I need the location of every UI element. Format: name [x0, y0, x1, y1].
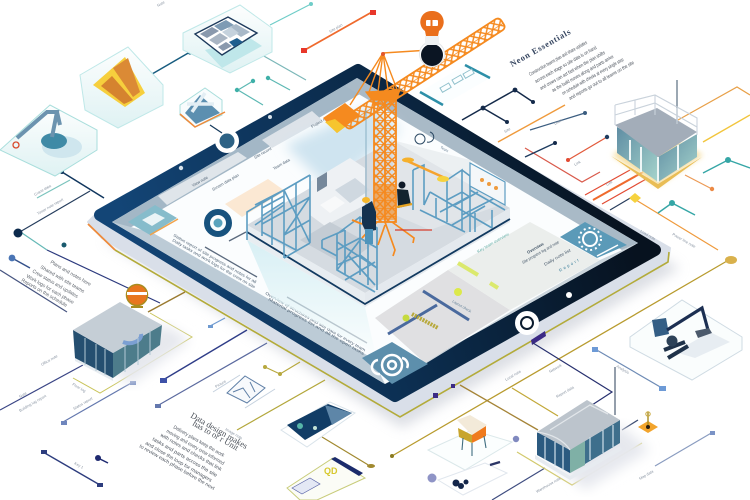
- article body: on schedule with checks at every single step: [561, 57, 625, 97]
- scaffold: right: [413, 165, 505, 232]
- text: gear panel caption: Key team overview: [476, 231, 511, 254]
- crane mast: [374, 97, 396, 222]
- article body: across each stage so site data is on hand: [534, 45, 598, 85]
- text: gear panel caption: [476, 231, 580, 273]
- article body: Construction teams plan and share updates: [528, 40, 589, 78]
- upper-left article: Crew status and updates: [31, 269, 79, 300]
- article body: and reports go out to all teams on the site: [568, 60, 636, 102]
- small captions: Crane data: [34, 184, 53, 197]
- small captions: Data: [554, 118, 563, 126]
- panel: teal at-sign card: [362, 342, 428, 384]
- sign board: [470, 163, 505, 205]
- upper-left article: Reports on the schedule: [20, 278, 68, 309]
- text: screen captions: Team data: [272, 157, 291, 171]
- article body: as the build moves along and parts arrive: [551, 54, 615, 94]
- icon: gear: [579, 228, 618, 256]
- haze under platform: [247, 240, 375, 352]
- lower article: [138, 410, 250, 492]
- worker one: [352, 197, 376, 244]
- platform slab: [247, 140, 510, 307]
- crane apex and cables: [350, 50, 430, 105]
- small captions: Report data: [556, 385, 575, 399]
- building: lower left office: [73, 302, 190, 385]
- article heading: Data design makes: [189, 410, 250, 451]
- small captions: Floor log: [72, 382, 86, 393]
- upper-left article: [20, 260, 92, 309]
- upper-left article: Work logs for each phase: [25, 274, 75, 306]
- text: screen captions: Site record: [253, 146, 272, 160]
- small captions: Office note: [40, 354, 58, 367]
- panel: teal gear card: [560, 222, 627, 258]
- panel: teal image card: [128, 205, 178, 235]
- chart: site pipes on screen: Layout check: [452, 299, 472, 314]
- small captions: Note: [156, 0, 165, 8]
- tablet bezel knob, top left: [215, 129, 239, 153]
- article body: [138, 425, 226, 492]
- tablet bezel knob, bottom: [515, 311, 539, 335]
- article body: tasks and parts across the site: [151, 437, 218, 479]
- article heading: Neon Essentials: [508, 26, 573, 69]
- small captions: Picture: [214, 379, 227, 389]
- icon: picture outline: [213, 375, 275, 408]
- small captions: Status report: [72, 396, 94, 411]
- crane apex pin: [381, 52, 385, 56]
- icon: orange helmet badge: [126, 284, 148, 308]
- small captions: Tower note report: [36, 197, 65, 216]
- tablet screen: [112, 78, 638, 384]
- building: rooftop glass pavilion: [611, 95, 703, 189]
- panel: upper grey band: [262, 111, 322, 148]
- small captions: Analysis: [616, 364, 630, 375]
- hex panel: excavator: [630, 300, 742, 380]
- article body: [528, 40, 636, 102]
- phone: [281, 402, 355, 447]
- text: gear panel caption: Overview: [526, 241, 545, 255]
- hex panel: blueprint: [183, 5, 272, 73]
- haze: blue glow: [285, 105, 400, 190]
- icon: at sign: [372, 355, 408, 375]
- article body: moving and every crew informed: [165, 429, 225, 467]
- small captions: Site plan: [328, 23, 343, 34]
- text: screen captions: Status report of site progress and notes for all: [172, 233, 257, 284]
- card: app list panel: [420, 65, 490, 105]
- panel: lower text rules: [205, 232, 367, 343]
- panel: peach card: [225, 179, 285, 217]
- icon: target ring: [207, 212, 229, 234]
- small captions: Warehouse note: [536, 477, 562, 494]
- bezel dots: [179, 115, 572, 298]
- small captions: Cell: [606, 180, 613, 187]
- scaffold: front: [322, 217, 377, 292]
- hex panel: cross icon: [180, 88, 225, 127]
- tablet: [88, 70, 680, 428]
- crane counterweight: [323, 103, 360, 133]
- small captions: Key 1: [74, 461, 84, 470]
- icon: road sign: [638, 412, 658, 433]
- chart: site pipes on screen: [388, 263, 498, 334]
- lines, lower left: [0, 250, 370, 485]
- upper-left article: Plans and notes here: [49, 260, 92, 288]
- panel: grey header bar: [158, 152, 247, 205]
- small captions: Load note: [640, 229, 656, 241]
- small captions: Network: [548, 363, 563, 374]
- text: gear panel caption: Daily note list: [543, 247, 572, 267]
- article heading: has to or r Unit: [191, 418, 241, 453]
- article body: with notes and checks that link: [159, 433, 223, 473]
- small captions: Power line note: [672, 232, 696, 249]
- icon: screen glyph on back wall: Team: [440, 145, 449, 153]
- screen panels: [128, 105, 627, 384]
- text: screen captions: View note: [191, 174, 209, 188]
- small captions: Building log report: [18, 394, 48, 413]
- small captions: Local note: [504, 370, 522, 382]
- article body: and crews can act fast when the plan shifts: [539, 50, 607, 92]
- icon: orange bulb: [420, 11, 444, 36]
- icon: water tower: [457, 415, 487, 456]
- article body: to review each phase before the next: [138, 444, 216, 492]
- small captions: Note: [18, 391, 27, 399]
- text: screen captions: Screen data plan: [211, 172, 240, 192]
- card: lower phone list: QD: [324, 466, 338, 476]
- panel: upper right grey card: [448, 222, 600, 310]
- tower crane: [323, 11, 506, 256]
- article body: Delivery plans keep the work: [172, 425, 226, 459]
- article body: and close the loop for managers: [144, 441, 213, 484]
- crane jib: [341, 17, 506, 130]
- cluster: water tower card: [428, 415, 519, 495]
- hex panel: crane arm: [0, 105, 97, 176]
- text: screen captions: Project notes: [310, 113, 333, 129]
- top-right article: [508, 26, 636, 102]
- icon: screen glyph on back wall: [415, 132, 449, 153]
- icon: blob dots: [452, 480, 468, 489]
- building: lower right warehouse: [535, 400, 650, 490]
- hub ball: [420, 36, 444, 66]
- crane base legs: [362, 222, 432, 256]
- small captions: Site: [504, 127, 511, 134]
- worker two: [397, 182, 412, 208]
- text: screen captions: Material progress list and all the open tasks: [268, 297, 365, 356]
- small captions: Map data: [638, 469, 655, 481]
- yellow beam: [402, 158, 449, 182]
- lines, top right: [462, 80, 750, 250]
- text: screen captions: Daily tasks and work logs for the crew on site: [172, 238, 257, 290]
- scaffold: left: [247, 175, 310, 258]
- panel: lower grey card: [375, 270, 510, 363]
- isometric construction platform: [247, 132, 510, 307]
- text: screen captions: Overview of structures and site data for every team: [264, 291, 367, 353]
- text: gear panel caption: Report: [558, 257, 580, 273]
- interior walls: [300, 140, 500, 265]
- tablet port: [433, 331, 546, 398]
- text: gear panel caption: Site progress log and note: [521, 239, 560, 265]
- lines, right: [392, 261, 727, 500]
- upper-left article: Shared with site teams: [39, 265, 86, 295]
- lines, top left: [18, 4, 372, 250]
- card: lower phone list: [287, 457, 365, 500]
- small captions: Link: [574, 160, 582, 167]
- hex panel: gold wedge: [80, 47, 163, 128]
- crane hoist line: [365, 110, 367, 205]
- small captions: Image note: [224, 427, 243, 440]
- text: screen captions: [172, 113, 367, 356]
